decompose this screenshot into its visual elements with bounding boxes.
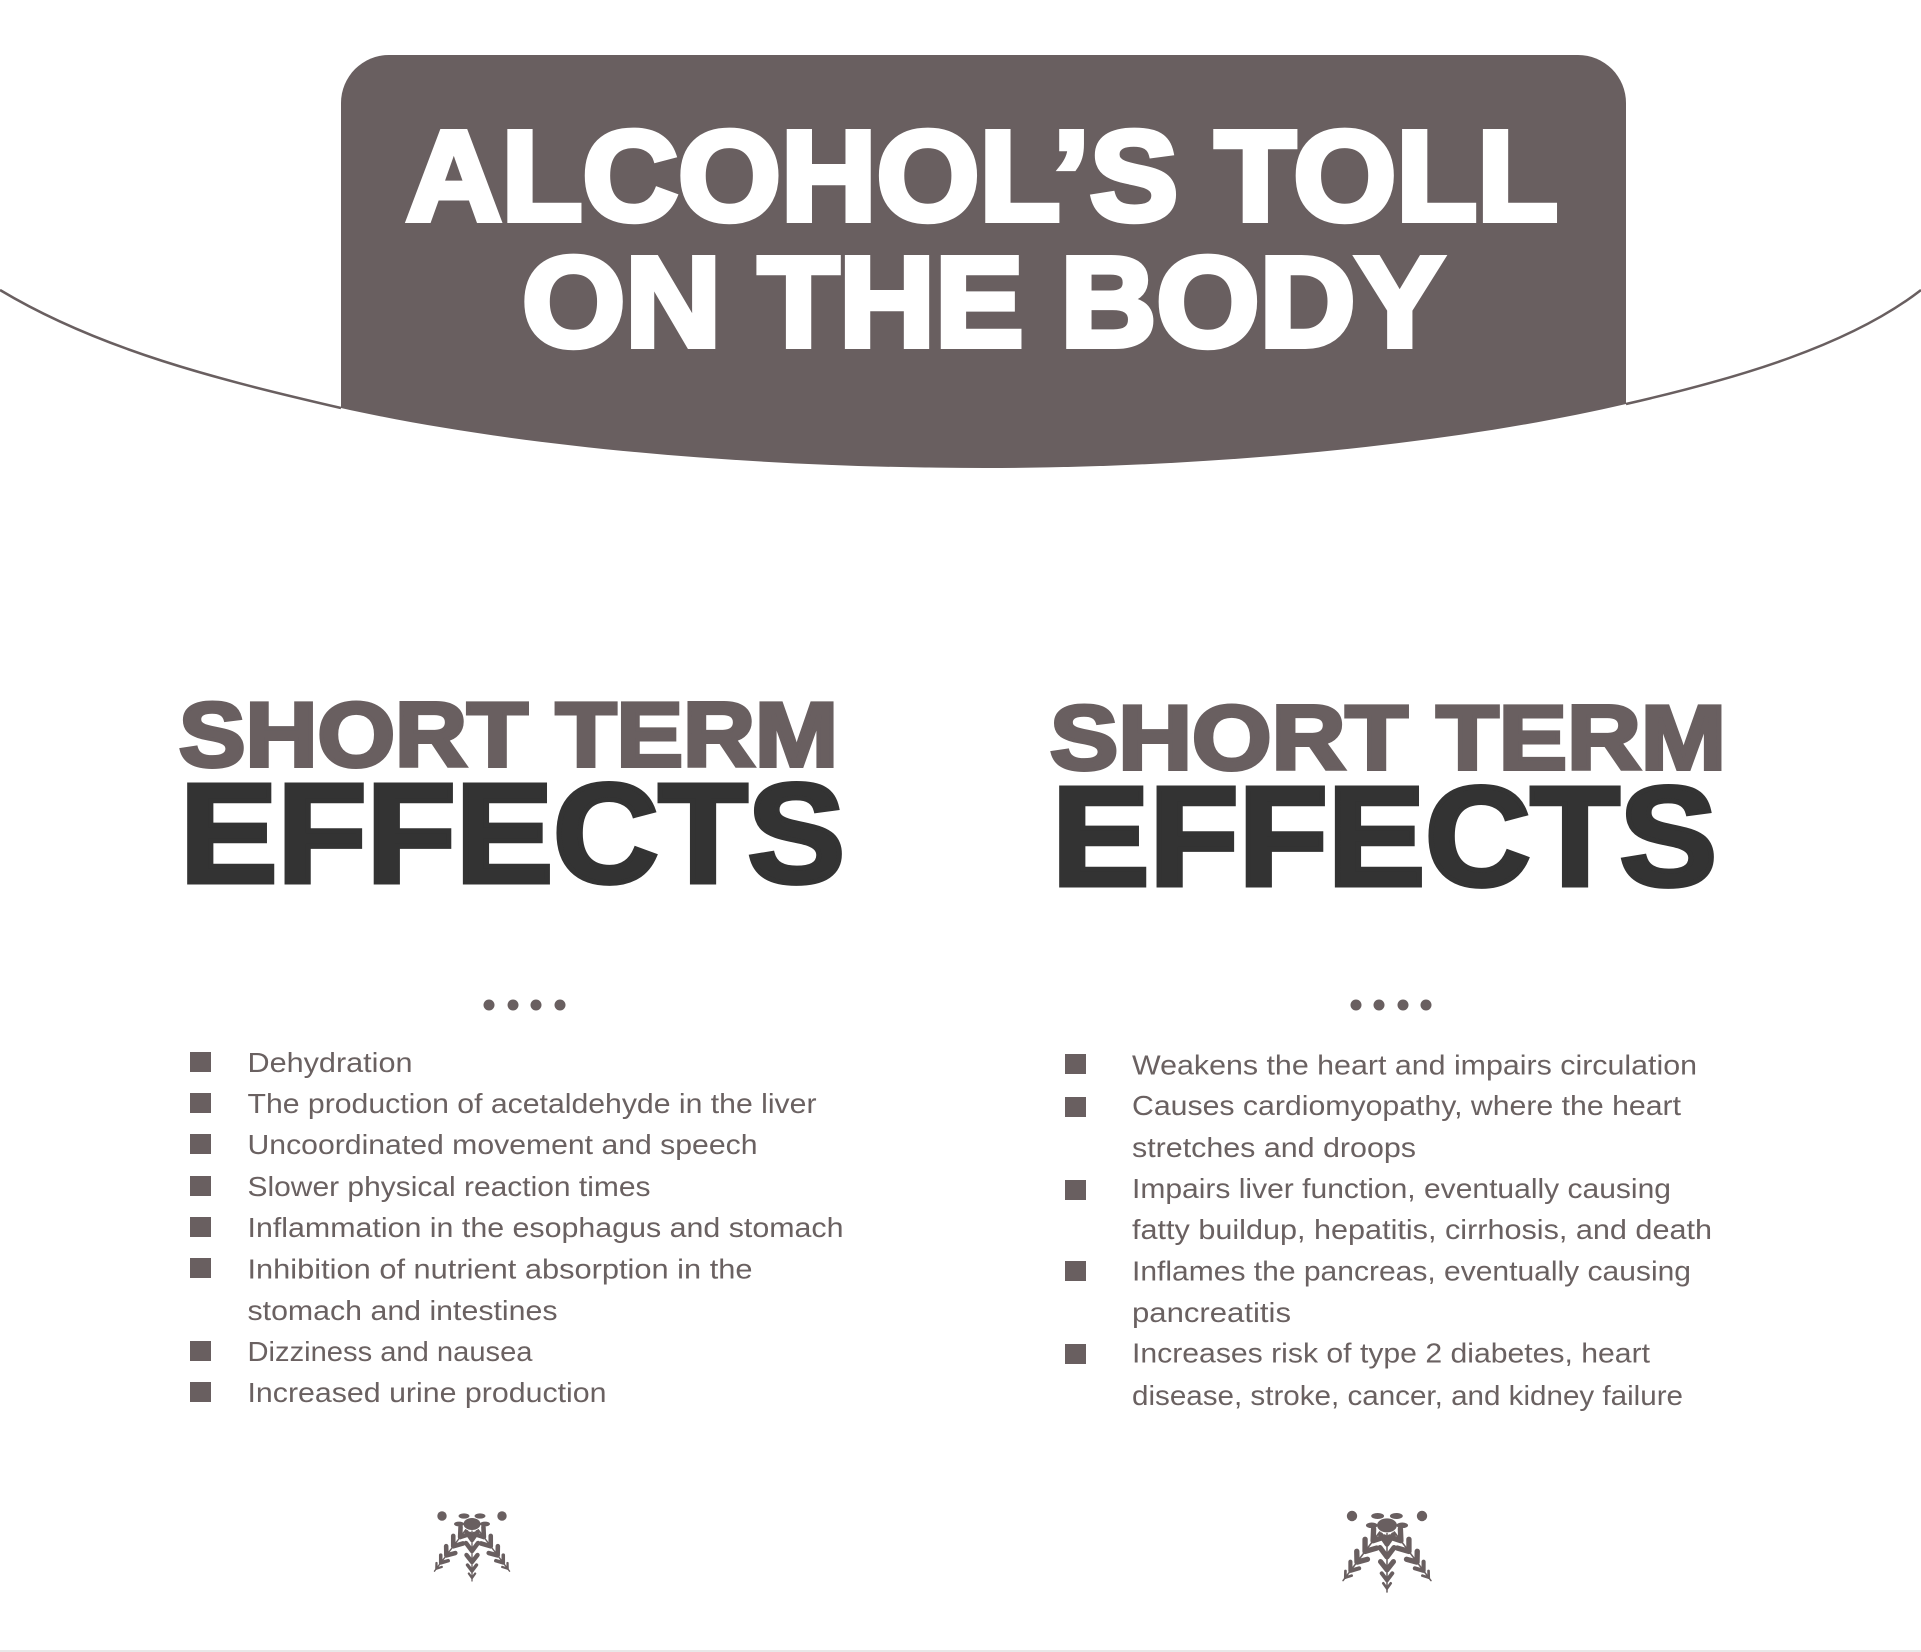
list left: Inhibition of nutrient absorption in the — [248, 1254, 752, 1284]
list right: fatty buildup, hepatitis, cirrhosis, and death — [1132, 1214, 1712, 1245]
curved line right — [1626, 290, 1921, 404]
title: ON THE BODY — [522, 231, 1444, 374]
heading: short term effects right — [1050, 688, 1726, 915]
list left: Inflammation in the esophagus and stomach — [248, 1212, 844, 1243]
list left — [248, 1047, 844, 1408]
list right: Increases risk of type 2 diabetes, heart — [1132, 1338, 1650, 1368]
list right: Inflames the pancreas, eventually causing — [1132, 1256, 1691, 1286]
panel: left column — [179, 685, 845, 1581]
bullet squares left — [190, 1052, 211, 1402]
panel: right column — [1050, 688, 1726, 1592]
icon: botanical ornament left — [429, 1511, 515, 1581]
heading: short term effects left: SHORT TERM — [179, 685, 838, 786]
list right: disease, stroke, cancer, and kidney failure — [1132, 1380, 1683, 1411]
title — [406, 105, 1558, 374]
heading: short term effects left — [179, 685, 845, 912]
list right — [1132, 1050, 1712, 1411]
dots divider left — [484, 1000, 566, 1010]
heading: short term effects right: EFFECTS — [1052, 757, 1717, 915]
list left: Uncoordinated movement and speech — [248, 1129, 758, 1160]
dots divider right — [1350, 1000, 1432, 1010]
list right: Causes cardiomyopathy, where the heart — [1132, 1090, 1681, 1121]
list right: Impairs liver function, eventually causing — [1132, 1173, 1671, 1204]
heading: short term effects right: SHORT TERM — [1050, 688, 1726, 789]
title: ALCOHOL’S TOLL — [406, 105, 1558, 248]
icon: botanical ornament right — [1337, 1511, 1437, 1592]
list left: Increased urine production — [248, 1377, 606, 1408]
list right: Weakens the heart and impairs circulation — [1132, 1050, 1697, 1080]
list right: stretches and droops — [1132, 1132, 1416, 1163]
bullet squares right — [1065, 1054, 1086, 1364]
curved line left — [0, 290, 341, 408]
footer edge line — [0, 1650, 1921, 1652]
list left: Dehydration — [248, 1047, 412, 1078]
heading: short term effects left: EFFECTS — [180, 754, 845, 912]
list left: Slower physical reaction times — [248, 1171, 650, 1202]
banner shape — [341, 55, 1626, 468]
list right: pancreatitis — [1132, 1297, 1291, 1328]
list left: The production of acetaldehyde in the liver — [248, 1088, 816, 1119]
title banner — [0, 55, 1921, 468]
list left: stomach and intestines — [248, 1295, 558, 1326]
list left: Dizziness and nausea — [248, 1336, 533, 1367]
